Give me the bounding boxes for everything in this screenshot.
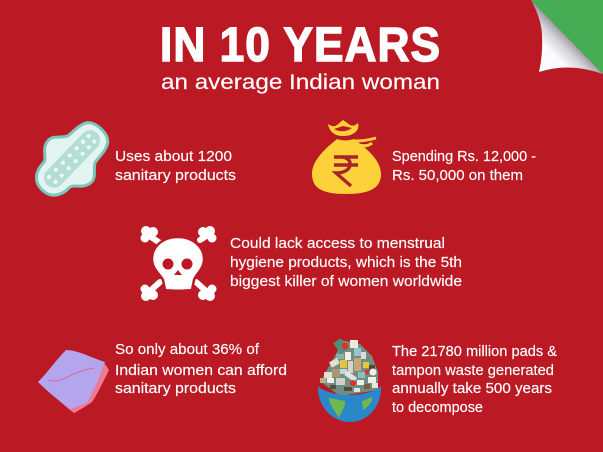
text: waste: to decompose xyxy=(392,400,483,416)
title: IN 10 YEARS xyxy=(160,18,441,71)
icon: money bag with rupee xyxy=(312,120,381,194)
text: menstrual hygiene: hygiene products, which is the 5th xyxy=(230,255,462,271)
text: menstrual hygiene xyxy=(230,236,462,290)
text: 36 percent: sanitary products xyxy=(115,381,236,397)
text: spending: Rs. 50,000 on them xyxy=(392,168,523,184)
subtitle: an average Indian woman xyxy=(161,70,440,94)
text: menstrual hygiene: biggest killer of women worldwide xyxy=(230,274,462,290)
icon: sanitary pad xyxy=(20,108,123,211)
icon: skull and crossbones xyxy=(140,226,216,301)
text: waste: annually take 500 years xyxy=(392,381,552,397)
text: 36 percent xyxy=(115,342,287,397)
text: spending: Spending Rs. 12,000 - xyxy=(392,149,536,165)
text: 36 percent: Indian women can afford xyxy=(115,363,287,379)
page curl corner xyxy=(531,0,603,74)
text: uses about 1200 xyxy=(115,149,236,184)
text: 36 percent: So only about 36% of xyxy=(115,342,260,358)
text: menstrual hygiene: Could lack access to menstrual xyxy=(230,236,445,252)
text: waste: The 21780 million pads & xyxy=(392,344,557,360)
text: waste: tampon waste generated xyxy=(392,363,554,379)
text: waste xyxy=(392,344,557,416)
text: uses about 1200: Uses about 1200 xyxy=(115,149,232,165)
icon: earth bowl with waste xyxy=(318,338,381,422)
icon: cloth napkin xyxy=(38,350,109,413)
text: uses about 1200: sanitary products xyxy=(115,168,236,184)
text: spending xyxy=(392,149,536,184)
